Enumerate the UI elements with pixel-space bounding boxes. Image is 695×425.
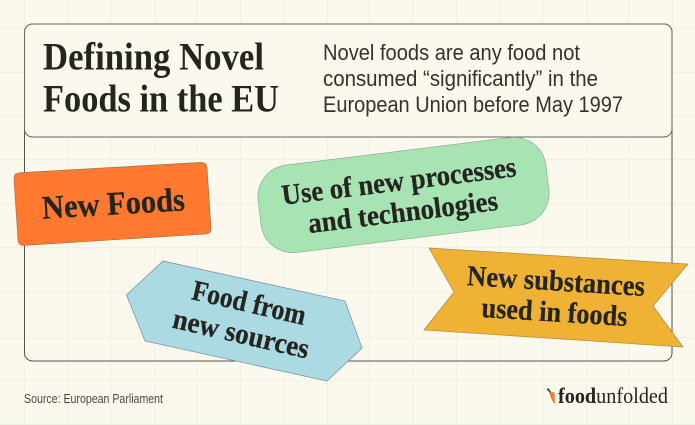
label: food from new sources: Food from: [189, 275, 309, 332]
description text: European Union before May 1997: [323, 92, 623, 117]
panel: new foods: [14, 162, 211, 245]
label: food from new sources: [170, 275, 312, 365]
label: use of new processes and technologies: and technologies: [306, 185, 500, 240]
title: [43, 36, 279, 120]
label: use of new processes and technologies: [280, 151, 518, 240]
label: food from new sources: new sources: [170, 303, 312, 365]
source note: Source: European Parliament: [24, 391, 163, 406]
panel: new substances used in foods: [424, 248, 688, 347]
label: new substances used in foods: New substances: [466, 260, 646, 303]
title: Foods in the EU: [43, 78, 279, 120]
icon: carrot: [546, 388, 555, 404]
description text: consumed “significantly” in the: [323, 66, 598, 91]
description text: [323, 40, 623, 117]
label: new substances used in foods: [466, 260, 646, 333]
label: new substances used in foods: used in foods: [481, 292, 628, 333]
panel: use of new processes and technologies: [254, 134, 553, 256]
label: new foods: New Foods: [41, 182, 186, 227]
wordmark: foodunfolded: [558, 383, 668, 408]
outer frame: [24, 24, 672, 361]
panel: food from new sources: [126, 261, 362, 381]
description text: Novel foods are any food not: [323, 40, 580, 65]
header panel: [24, 24, 672, 137]
logo: foodunfolded: [546, 383, 668, 408]
title: Defining Novel: [43, 36, 264, 78]
label: use of new processes and technologies: Use of new processes: [280, 151, 518, 212]
